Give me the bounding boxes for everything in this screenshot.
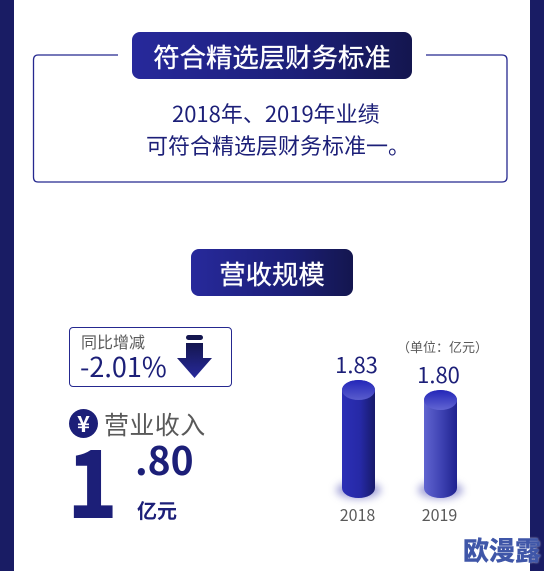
watermark: 欧漫露 — [463, 531, 541, 568]
cylinder 2018 — [342, 380, 375, 498]
heading: financial standard: 符合精选层财务标准 — [153, 36, 391, 75]
body text line two: 可符合精选层财务标准一。 — [146, 129, 410, 161]
bar chart — [332, 348, 467, 526]
value 2019: 1.80 — [417, 358, 460, 390]
cylinder cap 2019 — [424, 390, 457, 410]
callout: year on year change — [69, 327, 232, 387]
cylinder cap 2018 — [342, 380, 375, 400]
heading: revenue scale — [191, 249, 353, 296]
icon: down arrow — [177, 335, 212, 378]
heading: revenue scale: 营收规模 — [219, 253, 325, 292]
cylinder 2019 — [424, 390, 457, 498]
right border band — [530, 0, 544, 571]
unit note: （单位：亿元） — [397, 337, 488, 356]
panel: financial standard — [32, 54, 508, 183]
year 2018: 2018 — [340, 502, 375, 526]
panel outline — [32, 54, 508, 183]
callout value: -2.01% — [80, 346, 167, 385]
revenue value large digit: 1 — [68, 414, 117, 543]
year 2019: 2019 — [422, 502, 457, 526]
bar 2019 — [414, 358, 467, 526]
icon: yuan coin: ¥ — [77, 407, 90, 439]
callout label: 同比增减 — [81, 329, 145, 353]
revenue unit: 亿元 — [137, 495, 177, 524]
left border band — [0, 0, 14, 571]
revenue label: 营业收入 — [104, 406, 206, 442]
body text line one: 2018年、2019年业绩 — [172, 97, 380, 129]
value 2018: 1.83 — [335, 348, 378, 380]
shadow 2018 — [336, 481, 381, 499]
bar 2018 — [332, 348, 385, 526]
revenue value decimals: .80 — [135, 431, 194, 487]
icon: yuan coin — [69, 409, 98, 438]
shadow 2019 — [418, 481, 463, 499]
